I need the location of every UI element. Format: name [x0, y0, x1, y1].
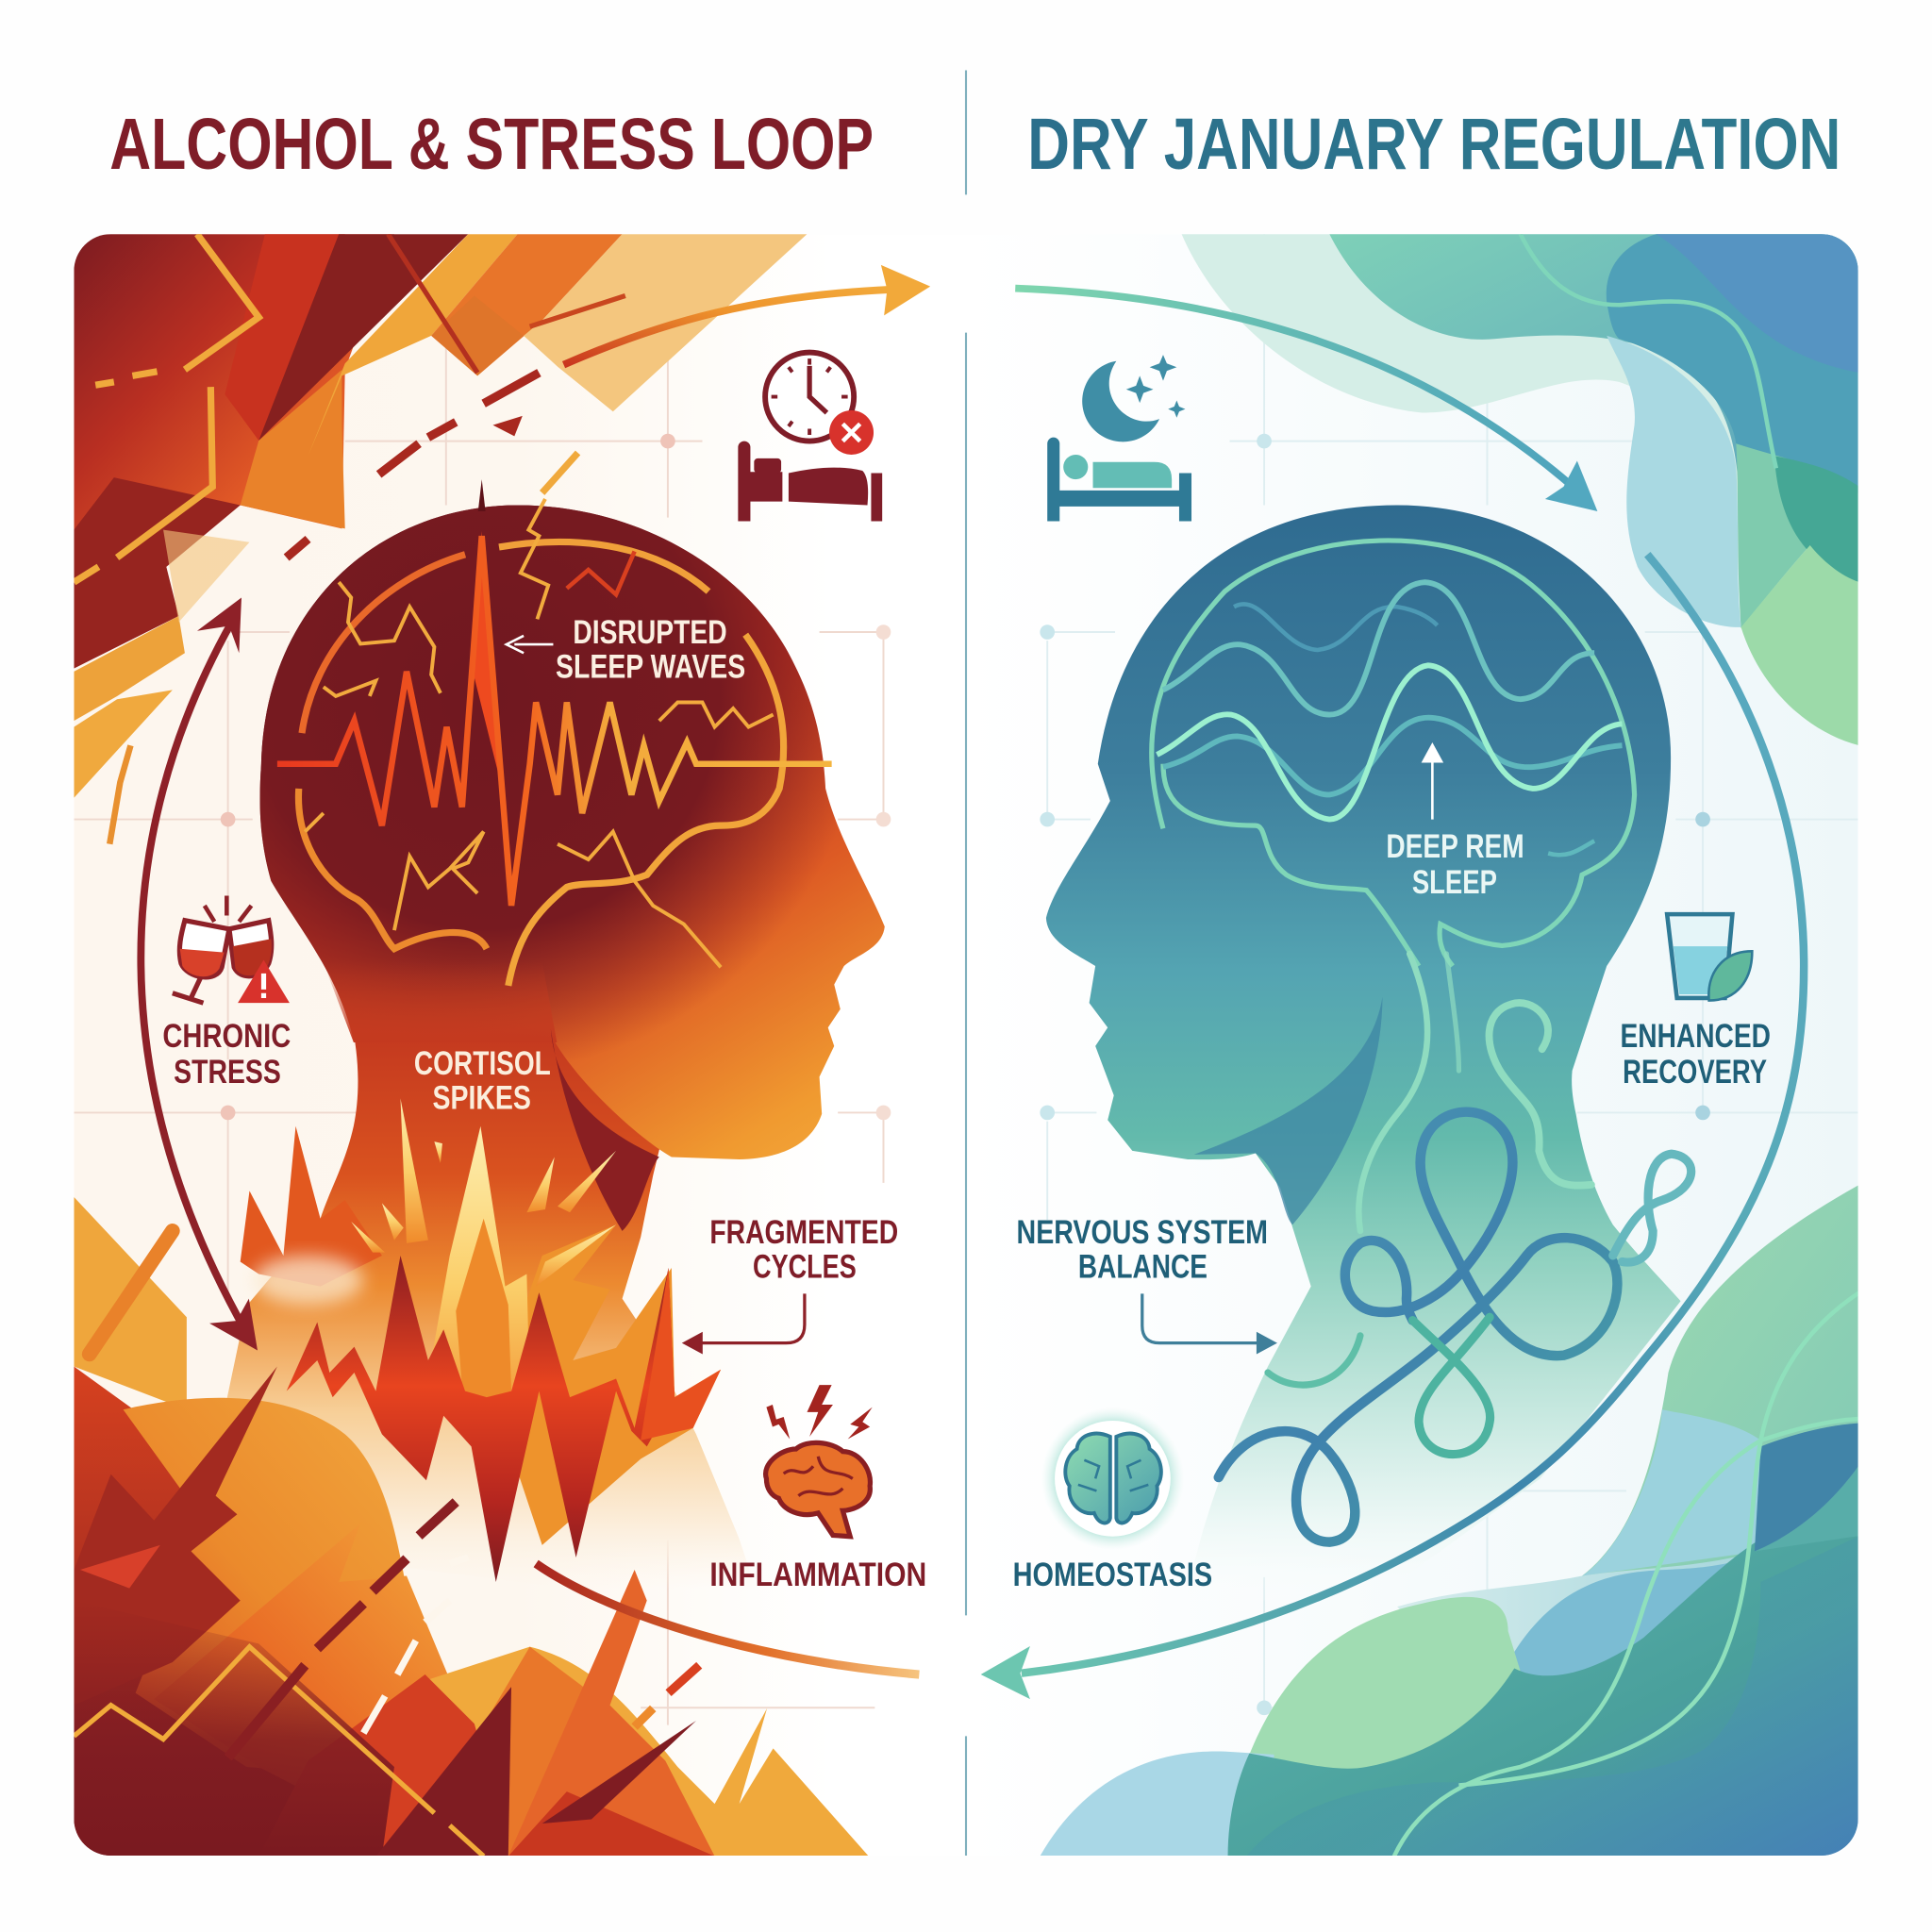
icon: wine glasses with warning: [173, 896, 290, 1003]
nervous system knots: [1219, 954, 1691, 1542]
fragment line: [536, 1563, 919, 1674]
pointer arrow: deep rem sleep: [1422, 742, 1443, 820]
head silhouette: [1046, 506, 1681, 1614]
icon: moon, stars and bed: [1047, 355, 1191, 521]
head silhouette: [197, 506, 885, 1614]
brain outline and deep sleep waves: [1152, 541, 1635, 966]
label: nervous system balance: BALANCE: [1078, 1248, 1208, 1285]
label: deep rem sleep: [1388, 834, 1523, 894]
label: cortisol spikes: [415, 1051, 550, 1109]
label: disrupted sleep waves: DISRUPTED: [573, 614, 727, 651]
label: homeostasis: HOMEOSTASIS: [1013, 1557, 1212, 1593]
label: fragmented cycles: CYCLES: [753, 1248, 857, 1285]
label: inflammation: INFLAMMATION: [709, 1557, 926, 1593]
pointer arrow: fragmented cycles: [685, 1293, 805, 1352]
icon: clock and bed with alert: [738, 353, 882, 521]
label: nervous system balance: [1018, 1220, 1266, 1278]
label: chronic stress: STRESS: [174, 1054, 281, 1091]
label: chronic stress: CHRONIC: [162, 1018, 291, 1055]
title: alcohol and stress loop: ALCOHOL & STRESS LOOP: [109, 104, 874, 185]
icon: inflamed brain: [766, 1385, 873, 1537]
cycle arrow: right arc: [981, 555, 1804, 1699]
label: disrupted sleep waves: SLEEP WAVES: [556, 648, 745, 685]
brain outline and disrupted waves: [277, 479, 832, 986]
arrow: stress loop top: [564, 265, 930, 365]
icon: balanced brain: [1041, 1407, 1184, 1550]
pointer arrow: nervous system balance: [1142, 1293, 1274, 1352]
label: cortisol spikes: CORTISOL: [414, 1045, 551, 1082]
label: nervous system balance: NERVOUS SYSTEM: [1017, 1214, 1268, 1251]
label: cortisol spikes: SPIKES: [432, 1080, 531, 1117]
pointer arrow: disrupted sleep waves: [507, 636, 553, 653]
panel: dry january regulation: [966, 104, 1859, 1857]
label: disrupted sleep waves: [557, 620, 745, 678]
arrow: regulation top: [1015, 289, 1597, 511]
label: deep rem sleep: DEEP REM: [1386, 828, 1524, 865]
label: fragmented cycles: FRAGMENTED: [709, 1214, 898, 1251]
icon: glass of water with leaf: [1667, 914, 1752, 1001]
panel: alcohol and stress loop: [74, 104, 966, 1857]
left illustrated background: [74, 234, 966, 1857]
neck burst: [241, 1098, 721, 1582]
label: chronic stress: [164, 1024, 291, 1083]
label: fragmented cycles: [711, 1220, 897, 1278]
label: enhanced recovery: RECOVERY: [1623, 1054, 1767, 1091]
label: enhanced recovery: [1622, 1024, 1770, 1083]
label: enhanced recovery: ENHANCED: [1621, 1018, 1771, 1055]
label: deep rem sleep: SLEEP: [1412, 864, 1497, 901]
right illustrated background: [966, 234, 1859, 1857]
cycle arrow: left arc: [141, 597, 258, 1351]
